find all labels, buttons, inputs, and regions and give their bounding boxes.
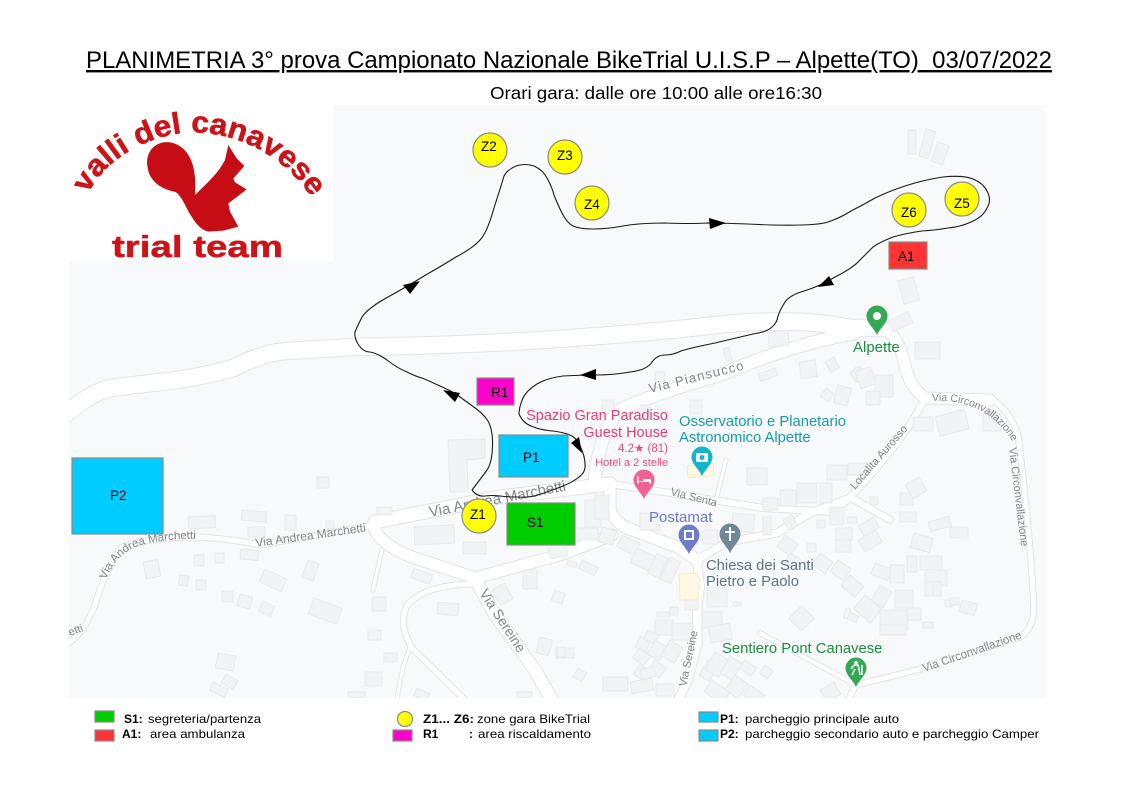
legend item A1 [95, 727, 245, 741]
pin: postamat [678, 524, 700, 554]
route direction arrows [403, 218, 834, 453]
subtitle: race times: Orari gara: dalle ore 10:00 alle ore16:30 [490, 83, 822, 103]
pin: church [720, 524, 740, 553]
legend item zones [398, 712, 590, 726]
legend item zones: Z1... Z6: [423, 712, 474, 726]
legend item S1: S1: [124, 712, 143, 726]
place labels: Pietro e Paolo [706, 574, 799, 590]
pin: observatory [692, 446, 712, 476]
legend item P1: P1: [720, 712, 739, 726]
street names: Via Sereine [677, 630, 701, 688]
legend [95, 711, 1039, 741]
yellow highlighted buildings [679, 464, 714, 600]
street names: Via Piansucco [647, 358, 745, 396]
place labels [526, 339, 900, 657]
buildings [143, 129, 1001, 705]
warm-up area R1: R1 [491, 385, 508, 400]
ambulance area A1: A1 [898, 249, 915, 264]
zone Z1: Z1 [470, 507, 486, 522]
zone Z3: Z3 [557, 148, 573, 163]
race route [355, 164, 990, 497]
street names: etti [67, 623, 85, 639]
road network [60, 322, 1034, 702]
street names: Via Andrea Marchetti [254, 521, 367, 550]
legend item S1: segreteria/partenza [148, 712, 261, 726]
ambulance area A1 [889, 242, 927, 269]
legend item R1: area riscaldamento [478, 727, 591, 741]
street names: Via Andrea Marchetti [98, 530, 195, 577]
pin: hotel [634, 470, 654, 499]
street names: Via Circonvallazione [1006, 447, 1030, 547]
place labels: Spazio Gran Paradiso [526, 408, 668, 424]
zone Z5: Z5 [954, 196, 970, 211]
legend item R1: R1 [423, 727, 439, 741]
place labels: Osservatorio e Planetario [679, 414, 846, 430]
map background [69, 105, 1046, 698]
legend item A1: A1: [122, 727, 141, 741]
street names: Via Sereine [476, 586, 529, 655]
legend item A1: area ambulanza [150, 727, 245, 741]
secondary parking P2: P2 [110, 488, 127, 503]
zone Z5 [945, 182, 979, 216]
pin: hiking trail [846, 658, 866, 687]
place labels: Guest House [583, 425, 668, 441]
zone Z6: Z6 [901, 205, 917, 220]
title: PLANIMETRIA 3° prova Campionato Nazionale BikeTrial U.I.S.P – Alpette(TO) 03/07/2022 [86, 47, 1052, 74]
legend item P2: P2: [720, 727, 739, 741]
place labels: Chiesa dei Santi [706, 558, 814, 574]
street names: Via Circonvallazione [932, 393, 1016, 440]
secondary parking P2 [72, 458, 163, 534]
street names: Via Senta [669, 486, 719, 510]
street names [67, 327, 1030, 688]
place labels: Hotel a 2 stelle [595, 457, 668, 469]
logo: valli del canavese trial team [74, 111, 322, 258]
start/secretariat S1: S1 [527, 515, 544, 530]
place labels: Astronomico Alpette [679, 430, 811, 446]
street names: Localita Aurosso [848, 423, 910, 492]
pin: Alpette [866, 306, 888, 335]
place labels: Sentiero Pont Canavese [722, 641, 882, 657]
main parking P1 [499, 435, 568, 477]
logo: valli del canavese trial team: trial team [112, 229, 283, 264]
logo: valli del canavese trial team: valli del canavese [74, 111, 322, 194]
warm-up area R1 [477, 378, 514, 405]
legend item P1: parcheggio principale auto [745, 712, 899, 726]
place labels: Alpette [853, 339, 900, 356]
place labels: Postamat [649, 509, 713, 526]
main parking P1: P1 [523, 450, 540, 465]
start/secretariat S1 [507, 503, 575, 545]
zone Z6 [892, 193, 926, 227]
zone Z4: Z4 [584, 197, 600, 212]
place labels: 4.2★ (81) [618, 443, 668, 455]
legend item zones: zone gara BikeTrial [477, 712, 590, 726]
legend item R1 [393, 727, 591, 741]
zone Z2 [473, 133, 507, 167]
legend item P2: parcheggio secondario auto e parcheggio Camper [745, 727, 1039, 741]
legend item S1 [95, 711, 261, 726]
zone Z3 [548, 140, 582, 174]
zone Z2: Z2 [481, 139, 497, 154]
zone Z4 [575, 186, 609, 220]
street names: Via Andrea Marchetti [428, 478, 567, 521]
street names: Via Circonvallazione [921, 630, 1023, 675]
zone Z1 [462, 499, 496, 533]
map panel [67, 111, 1038, 698]
legend item R1: : [469, 727, 473, 741]
